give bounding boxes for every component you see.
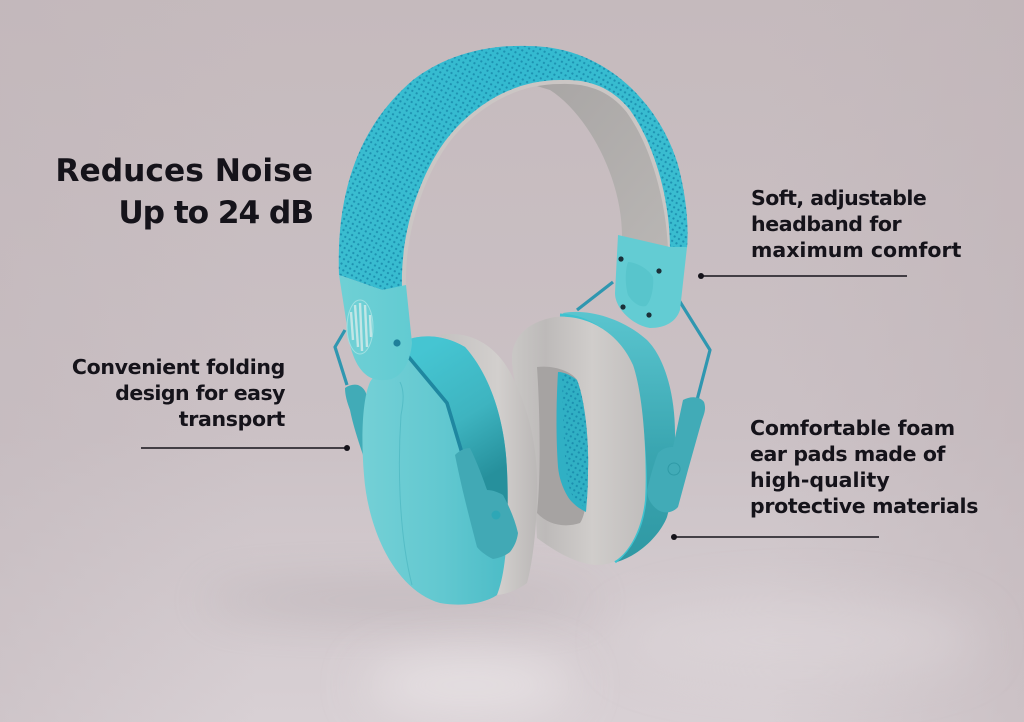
ear pad opening bbox=[537, 367, 588, 525]
left ear pad bbox=[440, 334, 537, 595]
icon: left wire yoke bbox=[397, 343, 462, 453]
headband teal mesh bbox=[339, 46, 688, 290]
left cup shell and face bbox=[362, 336, 508, 605]
text: folding callout bbox=[72, 355, 286, 431]
left cup seam bbox=[399, 382, 412, 585]
callout line: ear pads bbox=[671, 534, 879, 540]
icon: right ear cup and pad bbox=[512, 312, 675, 565]
callout line: headband bbox=[698, 273, 907, 279]
icon: left hinge clip large bbox=[455, 448, 518, 559]
text: folding callout: Convenient folding bbox=[72, 355, 285, 379]
text: headband callout: headband for bbox=[751, 212, 901, 236]
text: headband callout: maximum comfort bbox=[751, 238, 961, 262]
icon: left small wire bbox=[335, 330, 347, 385]
icon: left ear cup bbox=[362, 334, 537, 605]
headband inner rim bbox=[402, 80, 672, 288]
text: headband callout: Soft, adjustable bbox=[751, 186, 926, 210]
text: ear pads callout: protective materials bbox=[750, 494, 978, 518]
text: folding callout: transport bbox=[179, 407, 285, 431]
right ear pad bbox=[512, 317, 646, 565]
icon: right wire yoke bbox=[577, 282, 710, 400]
headband grey underside bbox=[530, 80, 672, 250]
title: Up to 24 dB bbox=[118, 195, 313, 231]
right cup shell bbox=[563, 312, 675, 562]
icon: right headband slider bbox=[615, 235, 687, 328]
title bbox=[55, 153, 313, 231]
text: headband callout bbox=[751, 186, 961, 262]
text: ear pads callout: high-quality bbox=[750, 468, 890, 492]
right cup rim bbox=[560, 315, 645, 562]
left cup darker side bbox=[397, 336, 508, 525]
text: folding callout: design for easy bbox=[115, 381, 285, 405]
icon: left headband slider with logo bbox=[339, 275, 412, 380]
title: Reduces Noise bbox=[55, 153, 313, 189]
icon: right hinge clip bbox=[647, 397, 705, 512]
icon: left small hinge clip bbox=[345, 385, 367, 455]
text: ear pads callout bbox=[750, 416, 978, 518]
text: ear pads callout: ear pads made of bbox=[750, 442, 945, 466]
text: ear pads callout: Comfortable foam bbox=[750, 416, 955, 440]
icon: headband bbox=[339, 46, 688, 290]
callout line: folding bbox=[141, 445, 350, 451]
